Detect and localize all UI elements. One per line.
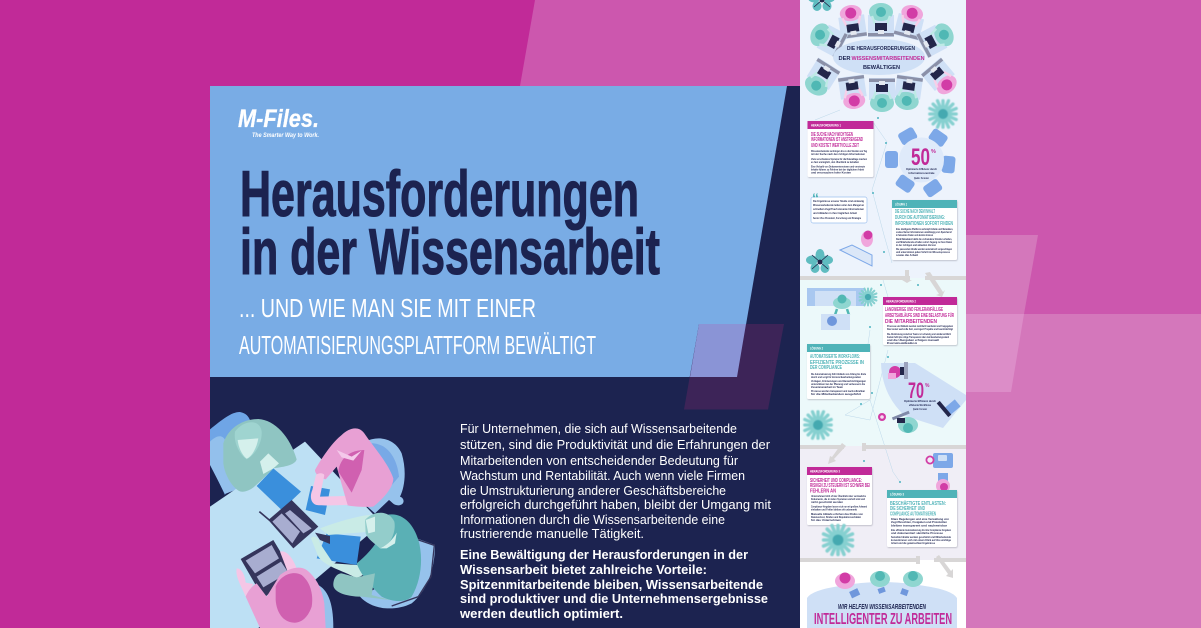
- card: Lösung 2: Zusammenarbeit im Team: [811, 385, 843, 389]
- quote card: Wissensarbeitende leiden unter dem Mangel an: [813, 203, 864, 207]
- card: Lösung 1: sowie die Arbeit: [896, 253, 918, 257]
- card: Herausforderung 1: Inhalte führen zu Fehlern bei der täglichen Arbeit: [811, 168, 864, 172]
- card: Herausforderung 3: FEHLERN AN: [810, 488, 836, 494]
- card: Herausforderung 3: Compliance-Vorgaben lassen sich nur mit großem Aufwand: [811, 504, 867, 508]
- card: Herausforderung 2: ARBEITSABLÄUFE SIND EINE BELASTUNG FÜR: [885, 312, 954, 319]
- divider with arrows: [800, 555, 966, 578]
- meeting ring of people: [800, 2, 962, 112]
- card: Lösung 3: Arbeit und die gewünschten Ergebnisse: [891, 541, 935, 545]
- card: Herausforderung 2: Prozesse und Abläufe werden mehrfach bearbeitet und freigegeben: [887, 324, 953, 328]
- card: Lösung 1: in der richtigen und aktuellen Version: [896, 243, 936, 247]
- card: Herausforderung 1: INFORMATIONEN IST ANSTRENGEND: [811, 137, 863, 143]
- stat: 70 percent table: 70: [908, 378, 924, 403]
- quote card: und Abläufen in ihrer täglichen Arbeit: [813, 211, 857, 215]
- card: Lösung 1: in Sekunden finden und abrufen können: [896, 233, 933, 237]
- card: Lösung 2: Vorlagen, Erinnerungen und Benachrichtigungen: [811, 379, 866, 383]
- intro paragraph: Für Unternehmen, die sich auf Wissensarbeitende: [460, 422, 737, 436]
- card: Lösung 1: Dank Metadaten bleibt die vorhandene Struktur erhalten,: [896, 237, 952, 241]
- closing banner: INTELLIGENTER ZU ARBEITEN: [814, 611, 952, 628]
- card: Herausforderung 1: Viele verschiedene Systeme für die Dateiablage machen: [811, 157, 867, 161]
- intro paragraph: Wachstum und Rentabilität. Auch wenn viele Firmen: [460, 469, 745, 483]
- card: Lösung 3: und dokumentiert sämtliche Prozesse: [891, 531, 943, 535]
- card: Herausforderung 2: DIE MITARBEITENDEN: [885, 319, 937, 325]
- quote card: Die Ergebnisse unserer Studie sind eindeutig: [813, 199, 864, 203]
- card: Lösung 3: BESCHÄFTIGTE ENTLASTEN:: [890, 500, 946, 507]
- panel: infographic preview strip: [800, 0, 966, 628]
- card: Herausforderung 2: Kommunikation: [887, 341, 917, 345]
- card: Herausforderung 3: Datenverlust, Strafen und Reputationsschäden: [811, 515, 861, 519]
- intro paragraph: erfolgreich durchgeführt haben, bleibt der Umgang mit: [460, 498, 772, 512]
- intro paragraph: frustrierende manuelle Tätigkeit.: [460, 527, 644, 541]
- stat: 70 percent table: %: [925, 383, 930, 389]
- card: Lösung 2: [807, 344, 870, 399]
- intro paragraph: [460, 422, 772, 541]
- closing banner: [807, 571, 957, 628]
- infographic title oval: DER: [838, 56, 851, 62]
- bold benefits paragraph: [459, 548, 768, 621]
- subtitle: [239, 293, 596, 360]
- infographic title oval: BEWÄLTIGEN: [863, 64, 900, 71]
- card: Herausforderung 1: [808, 121, 874, 177]
- card: Herausforderung 1: Eine Vielzahl von Dokumentversionen und verstreute: [811, 164, 865, 168]
- dotted connector lines: [815, 110, 919, 483]
- card: Herausforderung 2: HERAUSFORDERUNG 2: [886, 298, 917, 304]
- quote card: schnellem Zugriff auf relevante Informationen: [813, 207, 864, 211]
- card: Lösung 2: DER COMPLIANCE: [810, 365, 842, 371]
- card: Herausforderung 3: Manuelle Abläufe erhöhen das Risiko von: [811, 512, 863, 516]
- stat: 50 percent round table: %: [931, 149, 936, 155]
- icon: teal plant: [805, 412, 831, 438]
- card: Herausforderung 3: nicht geschützt werden: [811, 500, 843, 504]
- divider with arrows: [800, 443, 966, 464]
- infographic title oval: DIE HERAUSFORDERUNGEN: [847, 46, 915, 52]
- bold benefits paragraph: sind produktiver und die Unternehmensergebnisse: [460, 592, 768, 606]
- card: Lösung 1: Eine intelligente Plattform verknüpft Inhalte und Metadaten,: [896, 227, 953, 231]
- card: Herausforderung 1: und verursachen hohe Kosten: [811, 170, 851, 174]
- stat: 70 percent table: effiziente Workflows: [909, 403, 931, 407]
- logo: M-Files: M-Files.: [238, 105, 319, 133]
- card: Herausforderung 1: UND KOSTET WERTVOLLE ZEIT: [811, 143, 859, 149]
- stat: 50 percent round table: Quelle: Forrester: [914, 176, 930, 180]
- quote card: [811, 190, 867, 223]
- stat: 50 percent round table: 50: [911, 144, 930, 171]
- panel: navy backdrop: [210, 86, 800, 628]
- card: Herausforderung 3: RISIKEN ZU STEUERN IST SCHWER BEI: [810, 483, 870, 489]
- card: Lösung 2: LÖSUNG 2: [810, 346, 824, 350]
- panel: blue title panel: [210, 86, 787, 377]
- closing banner: WIR HELFEN WISSENSARBEITENDEN: [838, 604, 927, 611]
- card: Lösung 1: und unterstützen jeden Schritt im Wissensprozess: [896, 250, 950, 254]
- card: Herausforderung 3: HERAUSFORDERUNG 3: [810, 468, 841, 474]
- stat: 50 percent round table: [885, 126, 956, 198]
- divider with arrows: [800, 270, 966, 297]
- icon: plant top: [808, 0, 835, 11]
- card: Lösung 2: AUTOMATISIERTE WORKFLOWS:: [810, 354, 860, 360]
- card: Lösung 3: bleiben transparent und nachweisbar: [891, 524, 948, 528]
- card: Herausforderung 3: Unternehmen fehlt oft der Überblick über vertrauliche: [811, 494, 866, 498]
- subtitle: AUTOMATISIERUNGSPLATTFORM BEWÄLTIGT: [239, 330, 596, 360]
- card: Lösung 1: DIE SUCHE NACH DEM INHALT: [895, 209, 935, 215]
- card: Lösung 3: Sensible Inhalte werden geschützt und Mitarbeitende: [891, 535, 951, 539]
- card: Lösung 3: [887, 490, 957, 547]
- card: Lösung 2: durch und sorgt für kürzere Bearbeitungszeiten: [811, 375, 861, 379]
- card: Lösung 3: Klare Regelungen und eine Verwaltung von: [891, 517, 949, 521]
- icon: mug on blue tray: [926, 453, 953, 468]
- intro paragraph: stützen, sind die Produktivität und die Erfahrungen der: [460, 438, 770, 452]
- icon: navy and teal plant: [806, 249, 833, 273]
- icon: plant: [930, 101, 956, 127]
- card: Herausforderung 2: [883, 297, 957, 345]
- title: in der Wissensarbeit: [240, 215, 660, 288]
- icon: person at desk: [840, 230, 873, 266]
- card: Herausforderung 2: LANGWIERIGE UND FEHLERANFÄLLIGE: [885, 306, 943, 313]
- bold benefits paragraph: Eine Bewältigung der Herausforderungen in der: [460, 548, 748, 562]
- card: Lösung 2: EFFIZIENTE PROZESSE IN: [810, 360, 864, 366]
- card: Herausforderung 1: mit der Suche nach den richtigen Informationen: [811, 152, 865, 156]
- title: Herausforderungen: [240, 157, 639, 230]
- card: Herausforderung 3: [807, 467, 872, 525]
- intro paragraph: Mitarbeitenden von entscheidender Bedeutung für: [460, 454, 738, 468]
- icon: plant: [860, 289, 876, 305]
- card: Herausforderung 2: Das kostet wertvolle Zeit, verzögert Projekte und beeinträchtigt: [887, 327, 953, 331]
- card: Herausforderung 2: Zudem fehlt die nötige Transparenz über den Bearbeitungsstand: [887, 335, 949, 339]
- infographic title oval: [833, 39, 925, 75]
- icon: teal plant: [824, 526, 852, 554]
- card: Lösung 1: INFORMATIONEN SOFORT FINDEN: [895, 221, 953, 227]
- quote card: “: [812, 190, 819, 206]
- quote card: Senior Vice President, Forschung und Strategie: [813, 216, 861, 220]
- intro paragraph: Informationen durch die Wissensarbeitende eine: [460, 513, 725, 527]
- card: Herausforderung 2: Die Abstimmung zwischen Teams ist schwierig und unübersichtlich: [887, 332, 951, 336]
- card: Herausforderung 1: Wissensarbeitende verbringen bis zu drei Stunden am Tag: [811, 149, 867, 153]
- intro paragraph: die Umstrukturierung anderer Geschäftsbereiche: [460, 484, 726, 498]
- card: Lösung 2: Die Automatisierung führt Abläufe von Anfang bis Ende: [811, 372, 866, 376]
- card: Lösung 1: und Mitarbeitende erhalten sofort Zugang zu ihren Daten: [896, 240, 952, 244]
- stat: 50 percent round table: Informationszentrale: [908, 171, 935, 175]
- infographic title oval: WISSENSMITARBEITENDEN: [852, 56, 925, 62]
- illustration: four people around a meeting table: [210, 412, 435, 628]
- card: Lösung 3: DIE SICHERHEIT UND: [890, 506, 925, 512]
- card: Lösung 3: COMPLIANCE AUTOMATISIEREN: [890, 512, 936, 518]
- subtitle: ... UND WIE MAN SIE MIT EINER: [239, 293, 536, 323]
- title: [240, 157, 660, 288]
- card: Herausforderung 1: DIE SUCHE NACH WICHTIGEN: [811, 132, 853, 138]
- bold benefits paragraph: Wissensarbeit bietet zahlreiche Vorteile:: [460, 563, 707, 577]
- card: Herausforderung 3: für das Unternehmen: [811, 518, 841, 522]
- logo: M-Files: The Smarter Way to Work.: [252, 132, 319, 139]
- card: Lösung 2: Prozesse werden transparent und nachvollziehbar: [811, 389, 866, 393]
- person with magenta head: [936, 473, 950, 490]
- card: Lösung 1: [892, 200, 957, 260]
- card: Lösung 1: sodass Nutzer Informationen unabhängig vom Speicherort: [896, 230, 952, 234]
- stat: 70 percent table: Quelle: Forrester: [913, 407, 928, 411]
- card: Lösung 3: Eine effiziente Automatisierung löst die Compliance-Vorgaben: [891, 528, 951, 532]
- card: Lösung 1: DURCH DIE AUTOMATISIERUNG:: [895, 215, 945, 221]
- card: Lösung 3: Zugriffsrechten, Freigaben und Protokollen: [891, 520, 947, 524]
- card: Herausforderung 2: und die Übergaben erfolgen manuell: [887, 338, 939, 342]
- translucent parallelogram accent: [684, 324, 784, 410]
- card: Lösung 3: LÖSUNG 3: [890, 492, 905, 496]
- card: Herausforderung 3: einhalten und Fehler bleiben oft unbemerkt: [811, 508, 857, 512]
- stat: 70 percent table: Optimierte Effizienz durch: [904, 399, 936, 403]
- card: Herausforderung 1: HERAUSFORDERUNG 1: [811, 122, 842, 128]
- card: Lösung 3: konzentrieren sich mit einem Klick auf ihre wichtige: [891, 538, 951, 542]
- desk with person: [807, 288, 864, 330]
- stat: 50 percent round table: Optimierte Effizienz durch: [906, 167, 937, 171]
- stat: 70 percent table: [878, 362, 966, 433]
- card: Herausforderung 1: es fast unmöglich, den Überblick zu behalten: [811, 160, 859, 164]
- card: Lösung 2: unterstützen bei der Planung und verbessern die: [811, 382, 865, 386]
- card: Herausforderung 3: Dokumente, die in vielen Systemen verteilt sind und: [811, 497, 865, 501]
- card: Herausforderung 3: SICHERHEIT UND COMPLIANCE:: [810, 478, 862, 484]
- bold benefits paragraph: werden deutlich optimiert.: [459, 607, 623, 621]
- card: Lösung 1: LÖSUNG 1: [895, 202, 908, 206]
- card: Lösung 1: Die passenden Inhalte werden automatisch vorgeschlagen: [896, 247, 952, 251]
- bold benefits paragraph: Spitzenmitarbeitende bleiben, Wissensarbeitende: [460, 578, 763, 592]
- card: Lösung 2: für die Mitarbeitenden ausgeführt: [811, 392, 861, 396]
